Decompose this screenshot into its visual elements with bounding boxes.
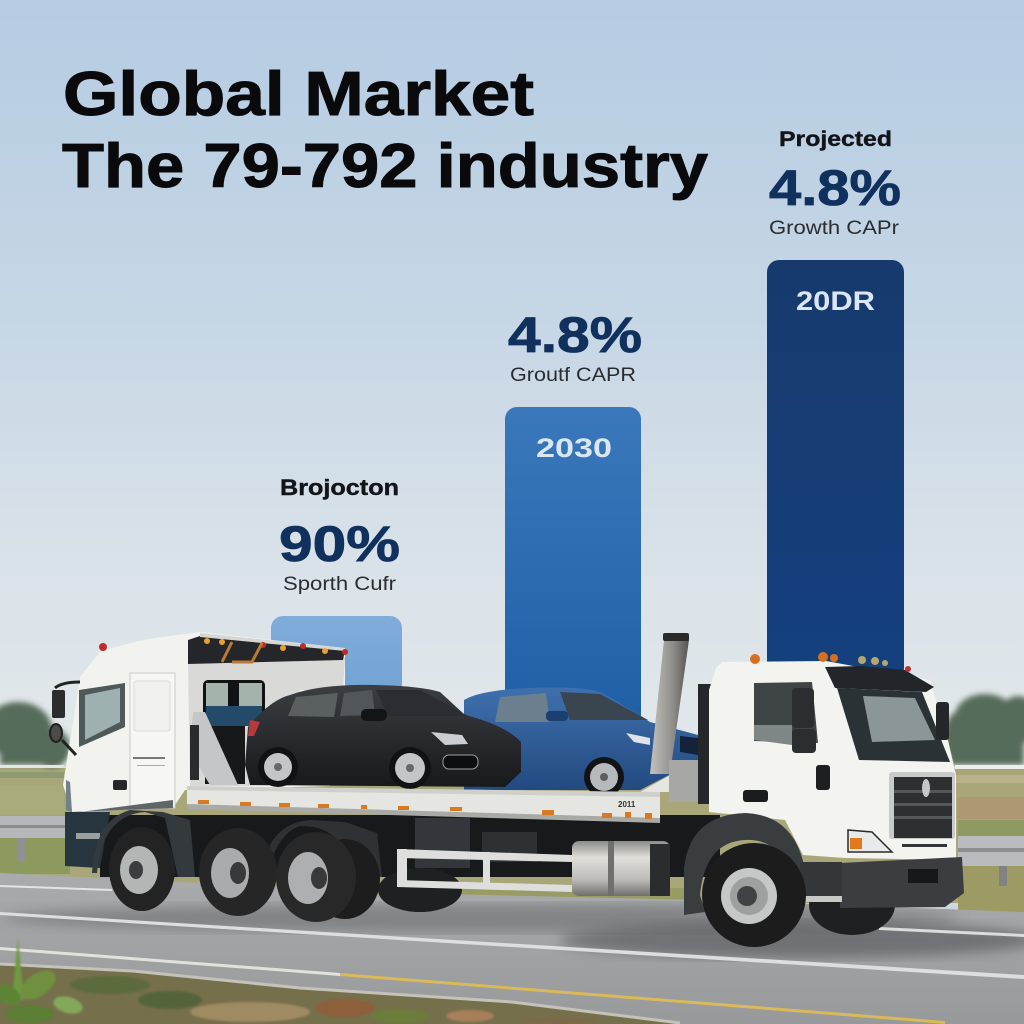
flatbed deck — [187, 774, 672, 823]
background landscape — [0, 694, 1024, 916]
road — [0, 873, 1024, 1024]
label: high bar: 20DR — [796, 286, 875, 316]
label: high bar: Projected — [779, 128, 892, 151]
label: high bar: 4.8% — [769, 160, 901, 216]
chassis underside — [65, 812, 720, 912]
front bumper and wheel arch — [684, 813, 964, 935]
title — [62, 60, 709, 201]
label: low bar: 90% — [279, 516, 400, 572]
label: mid bar — [508, 307, 642, 463]
side rail and fuel tank — [397, 841, 670, 896]
rear wheels — [109, 827, 380, 922]
lift post — [650, 633, 714, 804]
fenders rear — [92, 810, 382, 877]
label: mid bar: 2030 — [536, 433, 612, 463]
sky background — [0, 0, 1024, 780]
foreground grass and leaves — [0, 938, 680, 1024]
flatbed deck: 2011 — [618, 800, 636, 809]
label: high bar: Growth CAPr — [769, 218, 900, 239]
label: mid bar: 4.8% — [508, 307, 642, 363]
label: low bar: Sporth Cufr — [283, 574, 397, 595]
flatbed tow truck — [50, 632, 964, 947]
title: The 79-792 industry — [62, 132, 709, 201]
rear cab body — [50, 632, 348, 812]
front wheel — [702, 843, 806, 947]
label: low bar: Brojocton — [280, 475, 399, 500]
car: blue — [464, 688, 698, 797]
guard rails — [0, 816, 1024, 886]
title: Global Market — [63, 60, 534, 129]
bar: low — [271, 616, 402, 726]
label: low bar — [279, 475, 400, 595]
front cab body — [709, 652, 956, 860]
bar: mid 2030 — [505, 407, 641, 727]
car: black — [245, 685, 521, 789]
label: mid bar: Groutf CAPR — [510, 365, 636, 386]
label: high bar — [769, 128, 901, 316]
bar: high — [767, 260, 904, 680]
